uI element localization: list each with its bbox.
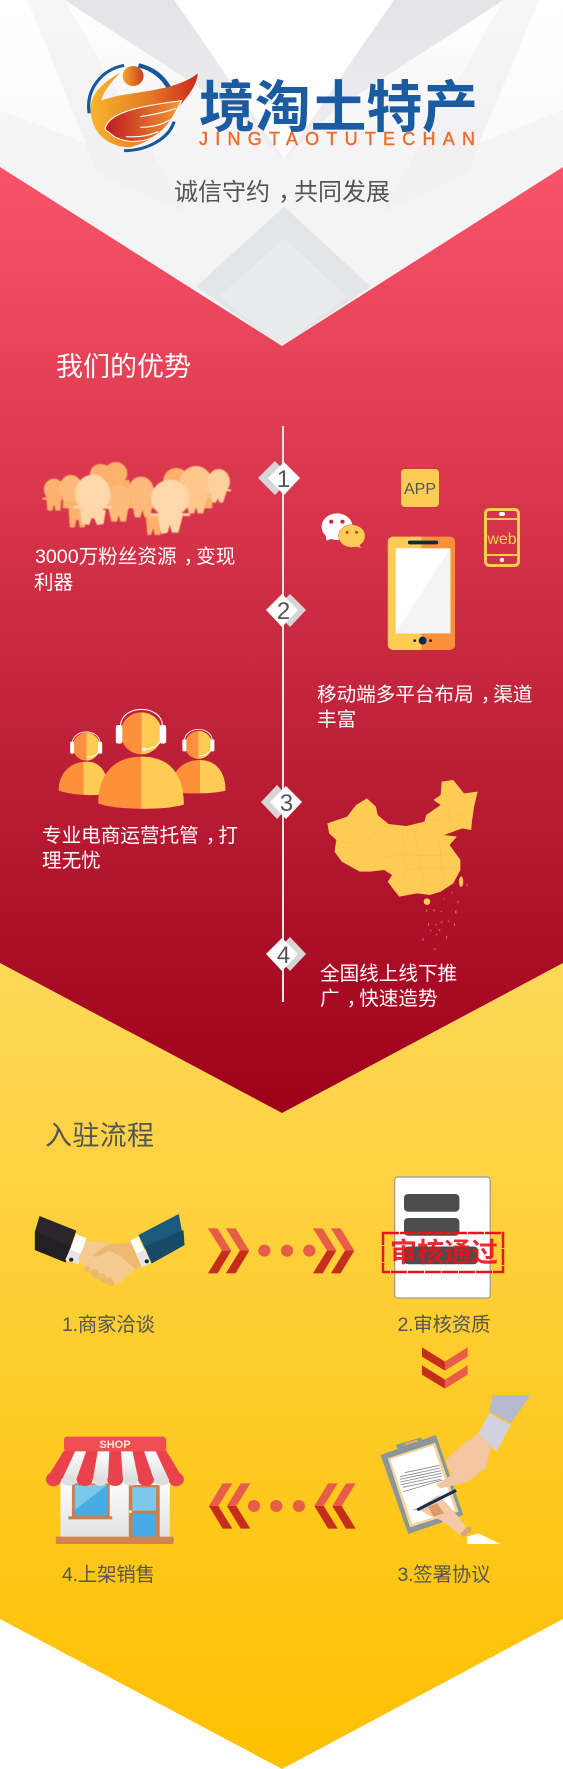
red section background — [0, 167, 563, 1113]
left agent — [59, 732, 109, 795]
text: mobile platforms: 移动端多平台布局 ，渠道 — [317, 684, 533, 706]
text: offline promotion: 全国线上线下推 — [320, 963, 457, 985]
map of China — [327, 780, 478, 950]
icon: smartphone — [388, 537, 455, 650]
awning — [46, 1451, 184, 1486]
icon: APP tile: APP — [404, 481, 436, 498]
icon: web phone — [485, 510, 519, 566]
centre agent — [98, 709, 184, 809]
heading: onboarding process: 入驻流程 — [45, 1121, 154, 1151]
header background — [0, 0, 563, 375]
text: e-commerce management: 专业电商运营托管 ，打 — [42, 825, 238, 847]
yellow section background — [0, 963, 563, 1769]
icon: crowd of fans — [42, 462, 231, 535]
logo — [89, 65, 478, 151]
label: step 1: 1.商家洽谈 — [62, 1314, 155, 1336]
text: e-commerce management — [42, 825, 238, 872]
shop sign text: SHOP — [99, 1439, 131, 1451]
logo name: 境淘土特产 — [199, 76, 478, 139]
logo emblem — [89, 65, 198, 151]
text: offline promotion — [320, 963, 457, 1010]
marker 4 — [266, 937, 306, 971]
icon: signing contract — [381, 1395, 531, 1544]
marker 1 — [258, 461, 300, 495]
label: step 4: 4.上架销售 — [62, 1564, 155, 1586]
arrow: step 2 to step 3 — [422, 1347, 468, 1389]
timeline — [258, 426, 306, 1002]
icon: approved document — [383, 1177, 503, 1298]
arrows: step 3 to step 4 — [209, 1483, 356, 1529]
icon: shop — [46, 1437, 184, 1544]
marker 2 — [266, 594, 306, 627]
icon: handshake — [35, 1214, 185, 1288]
heading: advantages: 我们的优势 — [56, 352, 191, 382]
text: fans: 利器 — [34, 572, 74, 594]
logo pinyin: JINGTAOTUTECHAN — [199, 129, 475, 149]
stamp: 审核通过 — [390, 1238, 498, 1268]
label: step 3: 3.签署协议 — [398, 1564, 491, 1586]
text: mobile platforms — [317, 684, 533, 731]
marker 1: 1 — [277, 466, 290, 493]
arrows: step 1 to step 2 — [208, 1228, 354, 1273]
marker 3: 3 — [280, 790, 293, 817]
icon: APP tile — [401, 469, 439, 507]
text: mobile platforms: 丰富 — [317, 709, 356, 731]
text: e-commerce management: 理无忧 — [42, 850, 101, 872]
text: fans: 3000万粉丝资源 ，变现 — [35, 546, 235, 568]
icon: web phone: web — [486, 531, 517, 548]
marker 4: 4 — [277, 942, 290, 969]
label: step 2: 2.审核资质 — [398, 1314, 490, 1336]
marker 3 — [261, 785, 302, 819]
icon: customer service agents — [59, 709, 226, 809]
marker 2: 2 — [277, 598, 290, 625]
right agent — [174, 729, 226, 793]
text: fans — [34, 546, 235, 594]
text: offline promotion: 广 ，快速造势 — [320, 988, 438, 1010]
icon: chat bubbles — [322, 513, 365, 548]
tagline: 诚信守约，共同发展 — [174, 179, 390, 206]
